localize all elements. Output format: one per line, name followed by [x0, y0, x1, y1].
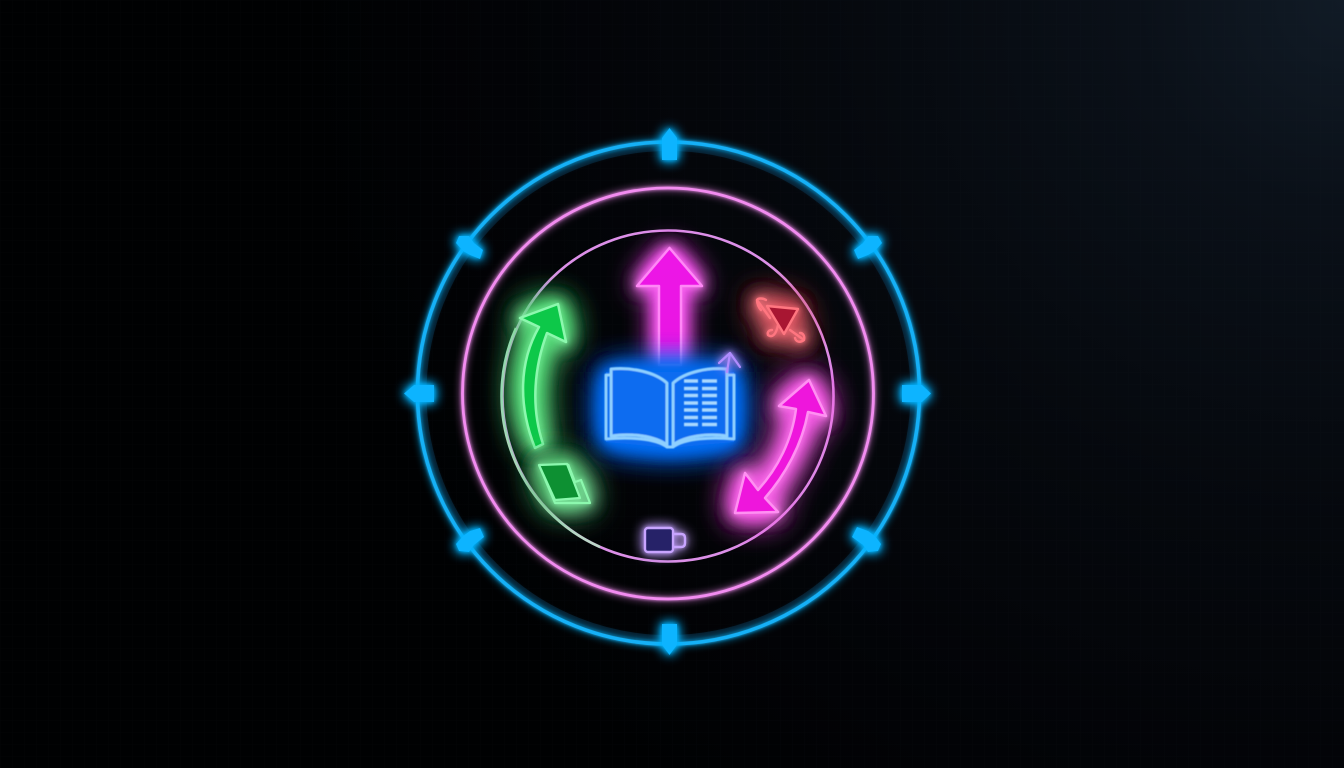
marker: right — [902, 385, 931, 402]
marker: top — [662, 128, 677, 160]
green curved arrow — [520, 304, 566, 448]
red compass icon — [757, 298, 804, 342]
book text lines — [684, 381, 717, 424]
small arrow on book — [719, 353, 740, 372]
magenta double-headed arrow — [735, 380, 826, 513]
coffee cup icon — [645, 528, 685, 552]
book outline — [606, 369, 734, 447]
marker: top left — [456, 236, 483, 259]
ring connector markers — [404, 128, 931, 655]
marker: bottom left — [456, 528, 484, 552]
middle pink ring — [462, 188, 874, 599]
book icon — [606, 353, 740, 448]
outer blue ring — [418, 142, 920, 644]
book glow and pages — [606, 372, 734, 448]
marker: bottom right — [852, 527, 881, 552]
marker: top right — [854, 236, 882, 259]
marker: left — [404, 385, 434, 402]
inner ring — [502, 230, 834, 562]
up arrow — [637, 248, 702, 365]
marker: bottom — [662, 624, 677, 655]
green folder icon — [539, 464, 590, 503]
